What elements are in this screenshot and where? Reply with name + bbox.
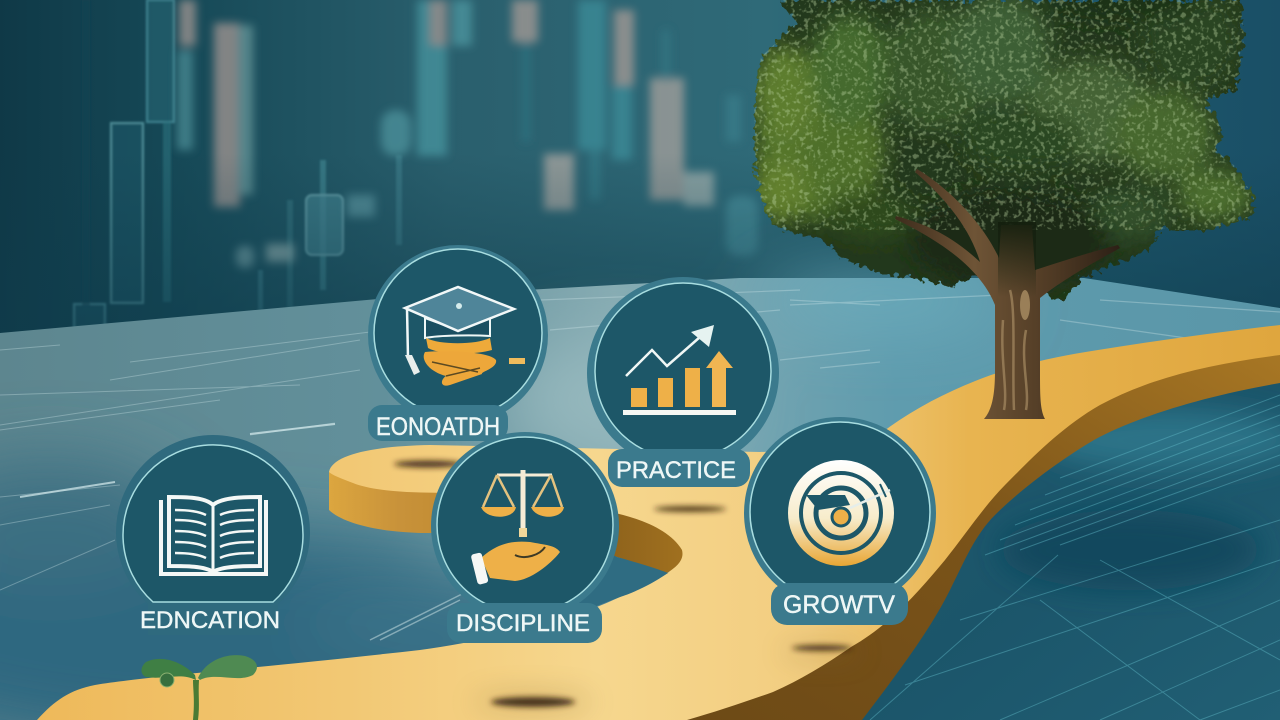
hole water <box>490 540 668 620</box>
hole brown wall <box>470 492 682 573</box>
badge body <box>587 277 779 469</box>
sprout <box>141 655 257 720</box>
tree <box>740 0 1270 419</box>
label pill: practice <box>608 449 750 487</box>
floor shading <box>0 280 1000 720</box>
icon: scales on a hand <box>471 470 564 585</box>
background wall <box>0 0 1280 340</box>
badge: book <box>116 435 310 635</box>
tree canopy <box>740 0 1270 310</box>
path side wall <box>680 352 1280 720</box>
lower right floor <box>850 375 1280 720</box>
icon: target with arrow <box>788 460 894 566</box>
soft blurred candles <box>177 0 758 268</box>
label pill: garbled growth <box>771 583 908 625</box>
tab side wall <box>329 472 470 533</box>
badge body <box>431 432 619 620</box>
floating shadows on the path <box>394 460 852 707</box>
badge: graduation cap <box>368 245 548 441</box>
blurred candlestick chart <box>74 0 758 328</box>
badge: practice <box>587 277 779 487</box>
floor plane <box>0 278 1280 720</box>
badge body <box>744 417 936 609</box>
right floor tonal shading <box>1000 410 1280 590</box>
label pill: discipline: DISCIPLINE <box>456 610 590 637</box>
badge: growth <box>744 417 936 625</box>
label pill: garbled education: EONOATDH <box>376 413 500 441</box>
icon: open book <box>161 497 266 574</box>
sharp outlined candles <box>74 0 402 328</box>
path top surface <box>37 325 1280 720</box>
tree trunk and branches <box>895 169 1120 419</box>
badge body <box>368 245 548 425</box>
canopy leaf highlights <box>740 0 1270 230</box>
icon: rising bar chart <box>623 325 736 415</box>
label pill: practice: PRACTICE <box>616 457 736 484</box>
label: garbled education: EDNCATION <box>140 607 280 634</box>
icon: graduation cap <box>405 287 525 386</box>
label pill: discipline <box>447 603 602 643</box>
soft shadow halo <box>473 646 862 710</box>
golden path <box>37 325 1280 720</box>
label pill: garbled growth: GROWTV <box>783 591 895 619</box>
badge: discipline <box>431 432 619 643</box>
floor grid lines <box>0 290 1280 640</box>
wall lower shading <box>0 0 1280 340</box>
badge body <box>116 435 310 635</box>
right floor perspective lines <box>870 395 1280 720</box>
